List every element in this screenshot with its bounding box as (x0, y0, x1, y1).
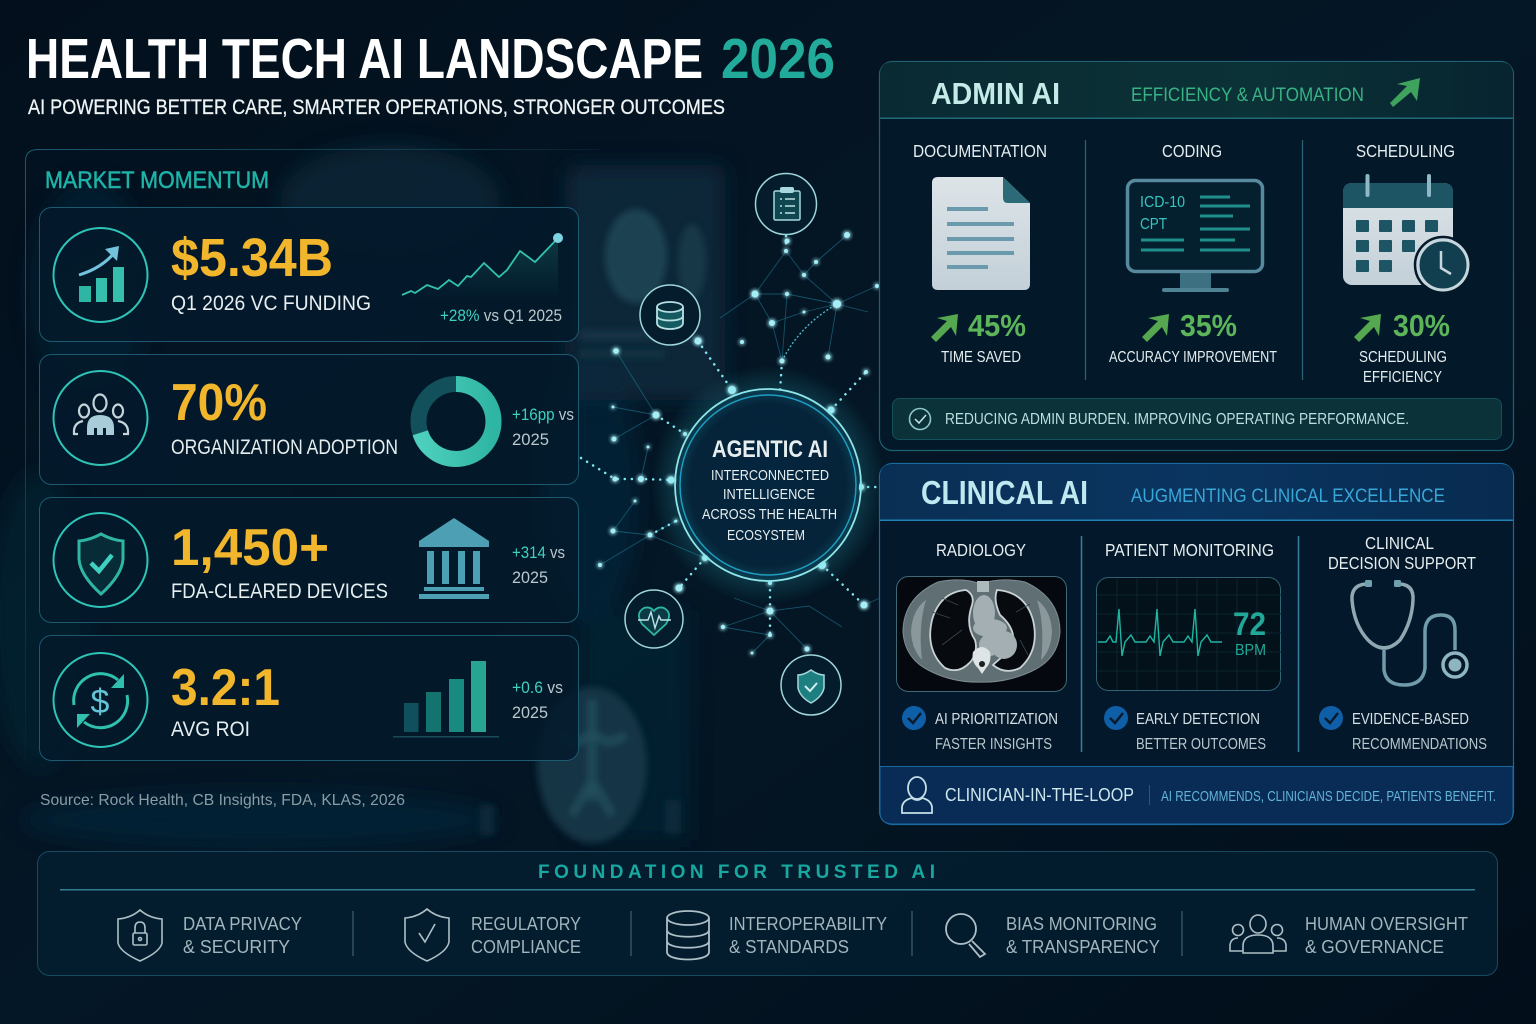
divider lines (1086, 140, 1302, 380)
network: agentic AI connections (581, 232, 880, 654)
metric: time saved: 45% (968, 308, 1026, 343)
delta: adoption: +16pp vs (512, 406, 574, 424)
column: decision support (1319, 533, 1487, 753)
label: adoption: ORGANIZATION ADOPTION (171, 436, 398, 459)
label: devices: FDA-CLEARED DEVICES (171, 580, 388, 603)
hub description: ECOSYSTEM (727, 527, 805, 544)
item: bias monitoring: BIAS MONITORING (1006, 914, 1157, 934)
value: adoption: 70% (171, 374, 267, 432)
label: ROI: AVG ROI (171, 718, 250, 741)
panel: clinical AI (880, 464, 1514, 824)
chart: ROI bars (393, 661, 499, 738)
column: decision support: CLINICAL (1365, 533, 1434, 553)
icon: shield node (781, 655, 841, 715)
item: interoperability (667, 911, 887, 960)
delta: devices (512, 544, 565, 587)
metric: scheduling efficiency: SCHEDULING (1359, 349, 1447, 366)
column: coding (1109, 141, 1277, 366)
icon: lock shield (118, 910, 162, 961)
metric: accuracy: 35% (1180, 308, 1237, 343)
icon: institution (419, 518, 489, 599)
decorative blurred scans (480, 209, 706, 843)
column: radiology: RADIOLOGY (936, 540, 1026, 560)
chart: ECG monitor (1096, 578, 1281, 690)
bullets: radiology: AI PRIORITIZATION (935, 711, 1058, 728)
item: regulatory compliance (405, 909, 581, 961)
column: patient monitoring (1096, 540, 1281, 753)
bullets: radiology (902, 706, 1058, 753)
icon: heart pulse node (625, 590, 683, 648)
heading: foundation: FOUNDATION FOR TRUSTED AI (538, 862, 935, 883)
title: 2026 (721, 27, 835, 91)
icon: database (667, 911, 709, 960)
value: devices: 1,450+ (171, 519, 329, 577)
heading: admin AI: ADMIN AI (931, 76, 1060, 111)
strip: clinician in the loop (880, 766, 1513, 824)
heading: market momentum: MARKET MOMENTUM (45, 167, 269, 194)
heading: clinical AI: CLINICAL AI (921, 474, 1088, 511)
bullets: monitoring: EARLY DETECTION (1136, 711, 1260, 728)
metric: accuracy (1109, 308, 1277, 366)
tagline: augmenting: AUGMENTING CLINICAL EXCELLENCE (1131, 486, 1445, 507)
tagline: efficiency: EFFICIENCY & AUTOMATION (1131, 85, 1364, 106)
card: ROI (40, 636, 578, 760)
icon: coding monitor: ICD-10 (1140, 194, 1185, 211)
metric: time saved (931, 308, 1026, 366)
bullets: decision support: EVIDENCE-BASED (1352, 711, 1469, 728)
icon: shield check (405, 909, 449, 961)
metric: scheduling efficiency: EFFICIENCY (1363, 369, 1442, 386)
column: coding: CODING (1162, 141, 1222, 161)
hub description: INTERCONNECTED (711, 467, 829, 484)
delta: devices: 2025 (512, 569, 548, 587)
item: interoperability: & STANDARDS (729, 937, 849, 957)
item: human oversight (1230, 914, 1468, 957)
column: radiology (896, 540, 1066, 753)
metric: time saved: TIME SAVED (941, 349, 1021, 366)
card: FDA devices (40, 498, 578, 622)
icon: stethoscope (1352, 580, 1467, 685)
banner: reducing admin burden (892, 398, 1502, 440)
icon: shield check (54, 513, 148, 607)
column: scheduling (1343, 141, 1471, 386)
chart: ECG monitor: 72 (1233, 606, 1266, 642)
icon: document (932, 177, 1030, 290)
label: funding: Q1 2026 VC FUNDING (171, 292, 371, 315)
source note: Source: Rock Health, CB Insights, FDA, KLAS, 2026 (40, 792, 405, 809)
value: funding: $5.34B (171, 228, 333, 288)
hub description: INTELLIGENCE (723, 486, 815, 503)
icon: coding monitor (1128, 180, 1262, 292)
bullets: decision support (1319, 706, 1487, 753)
icon: growth chart (54, 228, 148, 322)
delta: devices: +314 vs (512, 544, 565, 562)
metric: accuracy: ACCURACY IMPROVEMENT (1109, 349, 1277, 366)
metric: scheduling efficiency: 30% (1393, 308, 1450, 343)
column: decision support: DECISION SUPPORT (1328, 553, 1476, 573)
value: ROI: 3.2:1 (171, 659, 280, 717)
delta: ROI (512, 679, 563, 722)
bullets: monitoring: BETTER OUTCOMES (1136, 736, 1266, 753)
icon: people (1230, 915, 1286, 953)
admin header (880, 62, 1513, 119)
icon: database node (640, 285, 700, 345)
delta: adoption: 2025 (512, 431, 549, 449)
label: clinician in the loop: CLINICIAN-IN-THE-LOOP (945, 785, 1134, 805)
item: interoperability: INTEROPERABILITY (729, 914, 887, 934)
item: regulatory compliance: COMPLIANCE (471, 937, 581, 957)
item: human oversight: & GOVERNANCE (1305, 937, 1444, 957)
hub description: ACROSS THE HEALTH (702, 506, 837, 523)
item: data privacy: DATA PRIVACY (183, 914, 302, 934)
item: regulatory compliance: REGULATORY (471, 914, 581, 934)
metric: scheduling efficiency (1354, 308, 1450, 386)
icon: dollar cycle: $ (91, 683, 110, 721)
image: chest CT scan (896, 576, 1066, 692)
panel: market momentum (26, 150, 600, 790)
icon: clipboard node (756, 174, 816, 234)
bullets: decision support: RECOMMENDATIONS (1352, 736, 1487, 753)
delta: ROI: 2025 (512, 704, 548, 722)
column: documentation (913, 141, 1047, 366)
card: VC funding (40, 208, 578, 342)
subtitle: AI POWERING BETTER CARE, SMARTER OPERATIONS, STRONGER OUTCOMES (28, 96, 725, 119)
banner: reducing admin burden: REDUCING ADMIN BURDEN. IMPROVING OPERATING PERFORMANCE. (945, 411, 1409, 428)
icon: clinician (902, 777, 932, 813)
chart: funding sparkline (402, 233, 563, 300)
item: data privacy (118, 910, 302, 961)
divider lines (1082, 536, 1298, 752)
delta: ROI: +0.6 vs (512, 679, 563, 697)
card: organization adoption (40, 354, 578, 484)
icon: coding monitor: CPT (1140, 216, 1167, 233)
item: human oversight: HUMAN OVERSIGHT (1305, 914, 1468, 934)
arrow: upward trend (1390, 78, 1420, 107)
icon: dollar cycle (54, 653, 148, 747)
panel: admin AI (880, 62, 1514, 450)
column: patient monitoring: PATIENT MONITORING (1105, 540, 1274, 560)
item: data privacy: & SECURITY (183, 937, 290, 957)
hub heading: AGENTIC AI (712, 436, 828, 463)
icon: magnifier (946, 914, 985, 957)
chart: adoption donut (418, 384, 494, 459)
bullets: radiology: FASTER INSIGHTS (935, 736, 1052, 753)
icon: people (54, 371, 148, 465)
column: documentation: DOCUMENTATION (913, 141, 1047, 161)
bullets: monitoring (1104, 706, 1266, 753)
clinical header (880, 464, 1513, 521)
hub description (702, 467, 837, 544)
delta: funding: +28% vs Q1 2025 (440, 307, 562, 325)
title: HEALTH TECH AI LANDSCAPE (26, 27, 703, 91)
chart: ECG monitor: BPM (1235, 642, 1266, 659)
delta: adoption (512, 406, 574, 449)
icon: calendar and clock (1343, 176, 1471, 293)
item: bias monitoring: & TRANSPARENCY (1006, 937, 1160, 957)
column: scheduling: SCHEDULING (1356, 141, 1455, 161)
panel: foundation for trusted AI (38, 852, 1498, 976)
item: bias monitoring (946, 914, 1160, 957)
hub: agentic AI (650, 365, 886, 605)
